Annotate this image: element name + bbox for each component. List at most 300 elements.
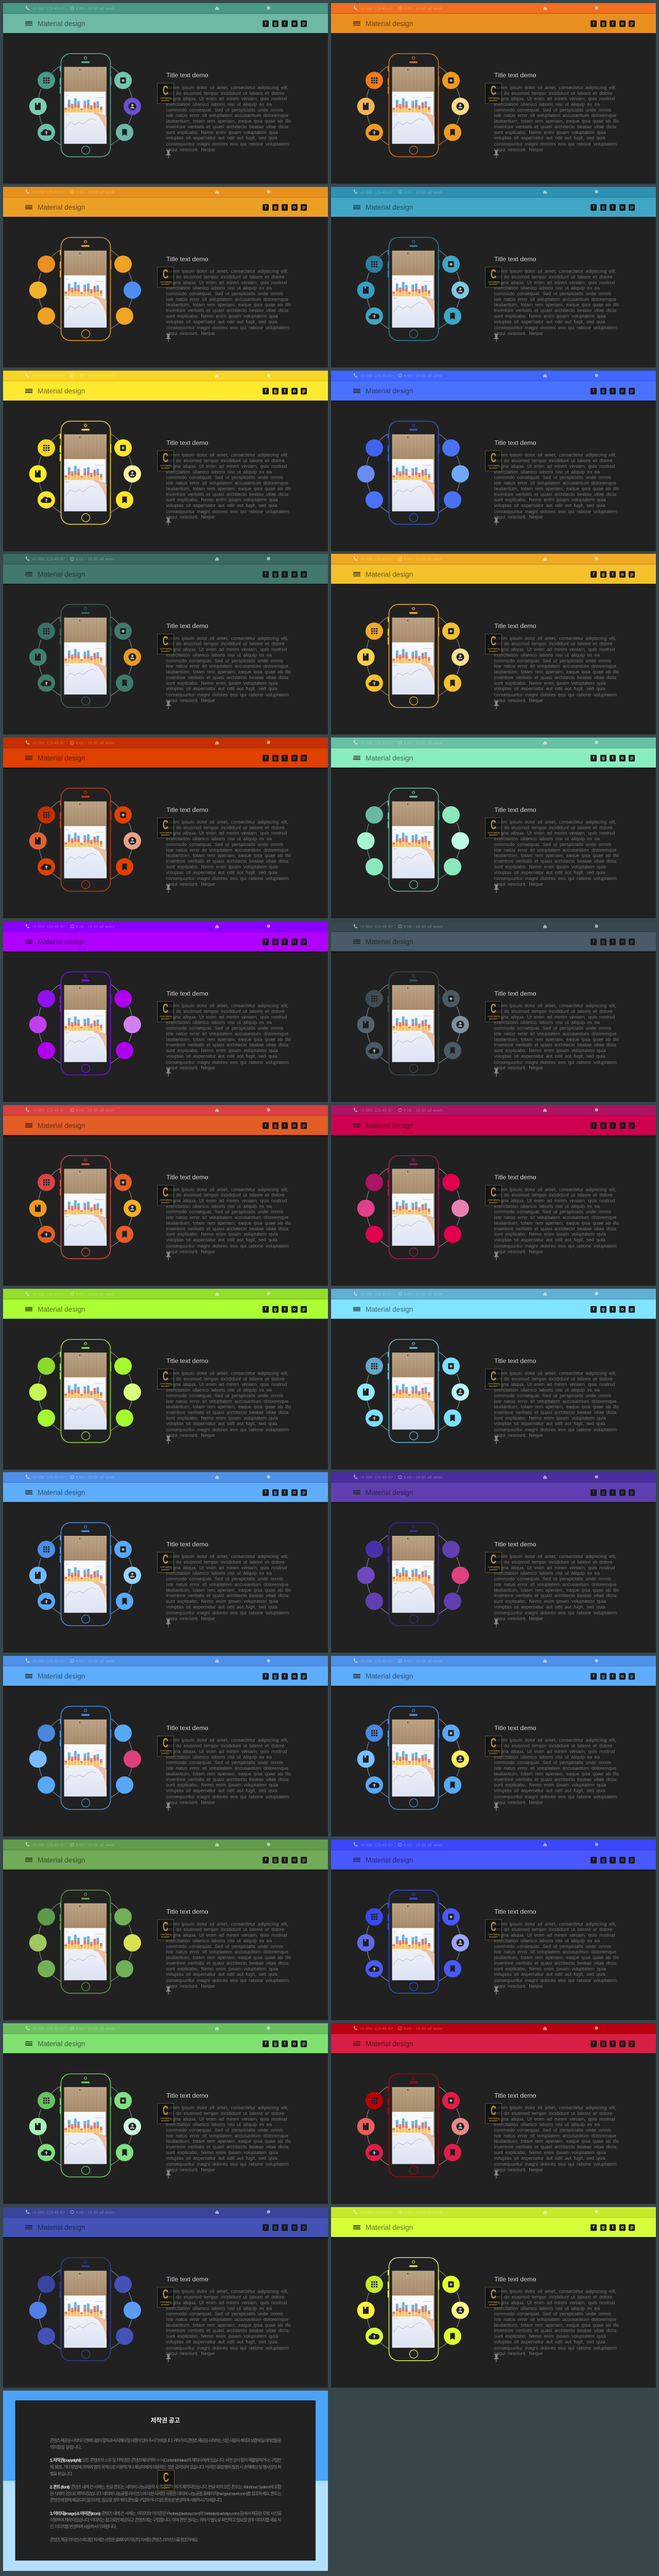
header bar <box>3 1299 328 1319</box>
watermark badge <box>485 1369 502 1389</box>
body text: Lorem ipsum dolor sit amet, consectetur adipiscing elit, <box>166 1003 288 1008</box>
panel: blue slide <box>331 370 656 551</box>
header bar: p <box>302 1673 305 1679</box>
header bar: Material design <box>366 2224 413 2231</box>
icon nodes <box>29 1540 141 1610</box>
header bar: f <box>265 1307 267 1312</box>
body text: sequi nesciunt. Neque <box>166 1800 215 1805</box>
watermark badge: C <box>163 1920 168 1934</box>
header bar: f <box>593 2225 595 2230</box>
title: Title text demo <box>494 1358 536 1365</box>
header bar <box>3 932 328 951</box>
header bar: p <box>630 1490 633 1496</box>
watermark badge <box>157 1552 174 1573</box>
header bar: Material design <box>366 387 413 395</box>
header bar: f <box>265 1123 267 1128</box>
body text: voluptas sit aspernatur aut odit aut fugit, sed quia <box>494 1238 605 1243</box>
body text: iste natus error sit voluptatem accusantium doloremque <box>166 1031 288 1037</box>
body text: inventore veritatis et quasi architecto beatae vitae dicta <box>166 1961 288 1966</box>
top bar: 9:00 - 18:00 all week <box>76 1842 115 1847</box>
body text: sequi nesciunt. Neque <box>166 698 215 703</box>
phone <box>388 1522 439 1625</box>
icon: pin <box>494 1069 498 1077</box>
header bar: t <box>612 1490 614 1496</box>
body text: voluptas sit aspernatur aut odit aut fugit, sed quia <box>166 1972 278 1977</box>
body text: iste natus error sit voluptatem accusantium doloremque <box>494 1582 616 1587</box>
phone <box>60 2074 111 2177</box>
header bar: o <box>621 21 624 26</box>
body text: exercitation ullamco laboris nisi ut aliquip ex ea <box>166 102 272 107</box>
body text: sunt explicabo. Nemo enim ipsam voluptatem quia <box>166 681 278 686</box>
body text: voluptas sit aspernatur aut odit aut fugit, sed quia <box>166 1604 278 1609</box>
body text: magna aliqua. Ut enim ad minim veniam, quis nostrud <box>494 1749 615 1754</box>
header bar: f <box>265 755 267 761</box>
top bar: +0 000 123-45-67 <box>32 374 65 378</box>
header bar: f <box>593 205 595 210</box>
icon nodes <box>29 2092 141 2161</box>
body text: exercitation ullamco laboris nisi ut aliquip ex ea <box>494 2306 600 2311</box>
body text: exercitation ullamco laboris nisi ut aliquip ex ea <box>166 1755 272 1760</box>
icon: pin <box>166 701 171 709</box>
body text: sunt explicabo. Nemo enim ipsam voluptatem quia <box>166 865 278 870</box>
top bar: +0 000 123-45-67 <box>360 1475 393 1480</box>
body text: inventore veritatis et quasi architecto beatae vitae dicta <box>494 1594 616 1599</box>
nodes <box>29 990 141 1059</box>
watermark badge <box>485 1920 502 1940</box>
top bar: 9:00 - 18:00 all week <box>404 1842 443 1847</box>
phone diagram <box>3 1656 328 1836</box>
top bar: 9:00 - 18:00 all week <box>76 740 115 745</box>
body text: exercitation ullamco laboris nisi ut aliquip ex ea <box>494 1020 600 1025</box>
header bar <box>3 197 328 217</box>
header bar: Material design <box>366 1489 413 1497</box>
phone diagram <box>331 1289 656 1469</box>
body text: Lorem ipsum dolor sit amet, consectetur adipiscing elit, <box>494 1187 616 1192</box>
icon: pin <box>166 150 171 159</box>
header bar: g <box>602 205 604 210</box>
body text: sed do eiusmod tempor incididunt ut labore et dolore <box>166 2295 284 2300</box>
body text: iste natus error sit voluptatem accusantium doloremque <box>166 1582 288 1587</box>
header bar: Material design <box>38 2224 85 2231</box>
icon: pin <box>494 885 498 893</box>
body text: commodo consequat. Sed ut perspiciatis unde omnis <box>166 291 283 296</box>
watermark badge: C <box>163 2104 168 2118</box>
body text: voluptas sit aspernatur aut odit aut fugit, sed quia <box>494 319 605 325</box>
body text: sequi nesciunt. Neque <box>166 2167 215 2172</box>
watermark badge: CONTENTS <box>160 464 171 467</box>
body text: inventore veritatis et quasi architecto beatae vitae dicta <box>166 2145 288 2149</box>
header bar: p <box>302 1857 305 1863</box>
header bar: t <box>612 571 614 577</box>
panel: deep orange slide <box>3 1105 328 1286</box>
body text: sed do eiusmod tempor incididunt ut labore et dolore <box>494 1743 613 1749</box>
body text: laudantium, totam rem aperiam, eaque ipsa quae ab illo <box>166 1404 291 1410</box>
body text: laudantium, totam rem aperiam, eaque ipsa quae ab illo <box>166 1221 291 1226</box>
body text: Lorem ipsum dolor sit amet, consectetur adipiscing elit, <box>166 1922 288 1927</box>
body text: sunt explicabo. Nemo enim ipsam voluptatem quia <box>166 2334 278 2339</box>
header bar: o <box>293 1307 296 1312</box>
closing note: 콘텐츠 제공 라이선스에 대한 자세한 사항은 홈페이지 하단의 자세한 콘텐츠 라이선스를 참조하세요. <box>50 2537 199 2542</box>
body text: voluptas sit aspernatur aut odit aut fugit, sed quia <box>166 2340 278 2345</box>
body text: inventore veritatis et quasi architecto beatae vitae dicta <box>166 1226 288 1231</box>
header bar: g <box>274 2225 277 2230</box>
body text: commodo consequat. Sed ut perspiciatis unde omnis <box>494 1944 611 1949</box>
header bar: p <box>302 388 305 394</box>
body text: voluptas sit aspernatur aut odit aut fugit, sed quia <box>166 686 278 691</box>
watermark badge: CONTENTS <box>160 97 171 99</box>
top bar: +0 000 123-45-67 <box>32 557 65 562</box>
watermark badge: C <box>163 451 168 465</box>
body text: consequuntur magni dolores eos qui ratione voluptatem <box>494 1059 617 1064</box>
body text: consequuntur magni dolores eos qui ratione voluptatem <box>166 692 289 697</box>
header bar: g <box>602 1857 604 1863</box>
section: copyright <box>50 2458 282 2476</box>
nodes <box>357 1174 469 1243</box>
watermark badge: MARKET <box>161 1752 170 1754</box>
header bar: Material design <box>366 570 413 578</box>
phone diagram <box>29 420 141 524</box>
body text: voluptas sit aspernatur aut odit aut fugit, sed quia <box>166 1788 278 1793</box>
top bar: 9:00 - 18:00 all week <box>76 1292 115 1296</box>
top bar: 9:00 - 18:00 all week <box>76 2210 115 2215</box>
header bar: Material design <box>38 1122 85 1129</box>
body text: inventore veritatis et quasi architecto beatae vitae dicta <box>494 1043 616 1048</box>
header bar <box>3 1483 328 1502</box>
body text: exercitation ullamco laboris nisi ut aliquip ex ea <box>494 1755 600 1760</box>
body text: inventore veritatis et quasi architecto beatae vitae dicta <box>494 2328 616 2333</box>
header bar: g <box>274 571 277 577</box>
header bar: Material design <box>366 204 413 211</box>
header bar: p <box>630 2225 633 2230</box>
body text: iste natus error sit voluptatem accusantium doloremque <box>166 1766 288 1771</box>
nodes <box>29 256 141 325</box>
body text: sunt explicabo. Nemo enim ipsam voluptatem quia <box>494 498 606 503</box>
body text: consequuntur magni dolores eos qui ratione voluptatem <box>494 2345 617 2350</box>
body text: laudantium, totam rem aperiam, eaque ipsa quae ab illo <box>494 1404 619 1410</box>
top bar: 9:00 - 18:00 all week <box>404 190 443 194</box>
watermark badge <box>485 267 502 287</box>
phone <box>388 1156 439 1259</box>
header bar: o <box>293 1490 296 1496</box>
body text <box>166 1187 291 1254</box>
watermark badge: CONTENTS <box>160 1566 171 1568</box>
phone diagram <box>29 972 141 1076</box>
top bar: +0 000 123-45-67 <box>32 190 65 194</box>
icon: pin <box>166 1069 171 1077</box>
title: Title text demo <box>494 1174 536 1181</box>
header bar: Material design <box>38 1672 85 1680</box>
body text: magna aliqua. Ut enim ad minim veniam, quis nostrud <box>494 647 615 652</box>
body text: laudantium, totam rem aperiam, eaque ipsa quae ab illo <box>166 1771 291 1776</box>
body text: magna aliqua. Ut enim ad minim veniam, quis nostrud <box>494 1382 615 1387</box>
header bar: t <box>612 755 614 761</box>
panel: orange slide <box>331 3 656 184</box>
header bar: g <box>274 1490 277 1496</box>
body text: sed do eiusmod tempor incididunt ut labore et dolore <box>494 1377 613 1381</box>
watermark badge: MARKET <box>161 2119 170 2122</box>
body text: magna aliqua. Ut enim ad minim veniam, quis nostrud <box>166 1565 287 1570</box>
section: font: 콘텐츠에 함께 제공되지 않으므로, 필요할 경우 위의 폰트를 구입하거나 다른 폰트로 변경하여 사용하시기 바랍니다. <box>50 2498 223 2503</box>
header bar <box>3 14 328 33</box>
body text: laudantium, totam rem aperiam, eaque ipsa quae ab illo <box>166 2139 291 2144</box>
body text: iste natus error sit voluptatem accusantium doloremque <box>166 2317 288 2322</box>
phone diagram <box>357 420 469 524</box>
header bar: t <box>284 571 286 577</box>
top bar: 9:00 - 18:00 all week <box>76 1475 115 1480</box>
watermark badge: CONTENTS <box>488 1566 499 1568</box>
header bar: o <box>621 2041 624 2047</box>
header bar: f <box>265 1857 267 1863</box>
body text: sequi nesciunt. Neque <box>166 1433 215 1437</box>
body text: commodo consequat. Sed ut perspiciatis unde omnis <box>166 842 283 847</box>
body text: commodo consequat. Sed ut perspiciatis unde omnis <box>494 1760 611 1765</box>
icon nodes <box>357 2276 469 2345</box>
body text: sed do eiusmod tempor incididunt ut labore et dolore <box>494 641 613 647</box>
header bar: Material design <box>366 1122 413 1129</box>
body text: sunt explicabo. Nemo enim ipsam voluptatem quia <box>166 1416 278 1421</box>
body text: laudantium, totam rem aperiam, eaque ipsa quae ab illo <box>494 1771 619 1776</box>
header bar: t <box>612 1857 614 1863</box>
header bar: Material design <box>38 1856 85 1864</box>
watermark badge: MARKET <box>161 834 170 836</box>
body text: sed do eiusmod tempor incididunt ut labore et dolore <box>494 2111 613 2116</box>
body text: consequuntur magni dolores eos qui ratione voluptatem <box>166 876 289 881</box>
phone <box>60 1522 111 1625</box>
header bar: f <box>593 1490 595 1496</box>
top bar <box>331 1289 656 1299</box>
header bar: f <box>265 571 267 577</box>
header bar: o <box>293 1857 296 1863</box>
body text: sed do eiusmod tempor incididunt ut labore et dolore <box>166 275 284 280</box>
watermark badge <box>157 1736 174 1756</box>
body text: magna aliqua. Ut enim ad minim veniam, quis nostrud <box>166 96 287 101</box>
header bar: o <box>293 205 296 210</box>
header bar: Material design <box>38 1489 85 1497</box>
title: Title text demo <box>494 2092 536 2099</box>
icon: pin <box>165 1619 171 1627</box>
body text: Lorem ipsum dolor sit amet, consectetur adipiscing elit, <box>494 2289 616 2294</box>
body text: voluptas sit aspernatur aut odit aut fugit, sed quia <box>166 1421 278 1427</box>
watermark badge <box>485 818 502 838</box>
top bar <box>331 370 656 381</box>
watermark badge: MARKET <box>161 466 170 469</box>
top bar: +0 000 123-45-67 <box>360 190 393 194</box>
body text: consequuntur magni dolores eos qui ratione voluptatem <box>166 509 289 514</box>
top bar: 9:00 - 18:00 all week <box>76 557 115 562</box>
top bar: +0 000 123-45-67 <box>32 6 65 11</box>
phone diagram <box>3 1839 328 2020</box>
watermark badge: MARKET <box>489 99 498 101</box>
body text: magna aliqua. Ut enim ad minim veniam, quis nostrud <box>494 1933 615 1938</box>
header bar: g <box>602 1490 604 1496</box>
body text: sed do eiusmod tempor incididunt ut labore et dolore <box>494 458 613 463</box>
watermark badge: CONTENTS <box>161 2484 172 2486</box>
watermark badge: CONTENTS <box>488 464 499 467</box>
watermark badge: MARKET <box>161 283 170 285</box>
icon nodes <box>29 72 141 141</box>
body text: sequi nesciunt. Neque <box>494 331 543 336</box>
body text: exercitation ullamco laboris nisi ut aliquip ex ea <box>494 102 600 107</box>
body text: inventore veritatis et quasi architecto beatae vitae dicta <box>166 308 288 313</box>
body text: exercitation ullamco laboris nisi ut aliquip ex ea <box>166 2122 272 2127</box>
icon: pin <box>493 2171 499 2178</box>
body text: exercitation ullamco laboris nisi ut aliquip ex ea <box>166 1938 272 1943</box>
icon nodes <box>357 72 469 141</box>
top bar: +0 000 123-45-67 <box>32 924 65 929</box>
section: font: 2. 폰트 (font): 콘텐츠 내에 쓴 서체는, 한글 폰트는, 네이버 나눔글꼴의 사용 권리에 의거 제작되었습니다. 한글 외의 모든 폰트는, Windows System에 포함 <box>50 2484 282 2489</box>
body text <box>494 85 619 152</box>
header bar: t <box>284 1307 286 1312</box>
phone <box>60 238 111 341</box>
watermark badge <box>485 1185 502 1206</box>
body text: commodo consequat. Sed ut perspiciatis unde omnis <box>166 658 283 664</box>
body text: exercitation ullamco laboris nisi ut aliquip ex ea <box>166 1387 272 1393</box>
panel: deep purple slide <box>331 1472 656 1653</box>
top bar <box>331 1839 656 1850</box>
watermark badge <box>157 634 174 654</box>
phone diagram <box>357 237 469 341</box>
header bar <box>3 748 328 768</box>
icon nodes <box>357 2092 469 2161</box>
header bar: g <box>274 1857 277 1863</box>
body text: exercitation ullamco laboris nisi ut aliquip ex ea <box>166 1204 272 1209</box>
nodes <box>29 2276 141 2345</box>
body text: sunt explicabo. Nemo enim ipsam voluptatem quia <box>166 1232 278 1237</box>
phone <box>388 788 439 891</box>
icon nodes <box>29 806 141 875</box>
body text: laudantium, totam rem aperiam, eaque ipsa quae ab illo <box>166 119 291 124</box>
title: Title text demo <box>166 2092 209 2099</box>
body text: magna aliqua. Ut enim ad minim veniam, quis nostrud <box>166 1198 287 1204</box>
body text: sequi nesciunt. Neque <box>494 147 543 152</box>
header bar: g <box>274 1307 277 1312</box>
body text: sequi nesciunt. Neque <box>166 882 215 887</box>
body text: Lorem ipsum dolor sit amet, consectetur adipiscing elit, <box>166 636 288 641</box>
panel: light blue slide, pink accent <box>3 1656 328 1836</box>
body text: laudantium, totam rem aperiam, eaque ipsa quae ab illo <box>494 1955 619 1960</box>
body text: sed do eiusmod tempor incididunt ut labore et dolore <box>166 1560 284 1565</box>
title: Title text demo <box>494 990 536 997</box>
top bar: 9:00 - 18:00 all week <box>404 740 443 745</box>
body text: Lorem ipsum dolor sit amet, consectetur adipiscing elit, <box>166 2105 288 2110</box>
body text: sed do eiusmod tempor incididunt ut labore et dolore <box>494 1927 613 1932</box>
icon nodes <box>357 256 469 325</box>
top bar: 9:00 - 18:00 all week <box>76 1108 115 1113</box>
header bar: f <box>593 1307 595 1312</box>
header bar: g <box>274 939 277 945</box>
body text: magna aliqua. Ut enim ad minim veniam, quis nostrud <box>494 464 615 469</box>
body text: exercitation ullamco laboris nisi ut aliquip ex ea <box>494 469 600 474</box>
phone <box>60 788 111 891</box>
body text: commodo consequat. Sed ut perspiciatis unde omnis <box>494 2312 611 2316</box>
body text: laudantium, totam rem aperiam, eaque ipsa quae ab illo <box>166 853 291 858</box>
body text: consequuntur magni dolores eos qui ratione voluptatem <box>166 325 289 330</box>
header bar: f <box>265 388 267 394</box>
nodes <box>29 1724 141 1794</box>
header bar <box>331 1116 656 1135</box>
watermark badge: MARKET <box>489 1752 498 1754</box>
header bar: t <box>612 1307 614 1312</box>
body text: magna aliqua. Ut enim ad minim veniam, quis nostrud <box>494 2116 615 2122</box>
body text: inventore veritatis et quasi architecto beatae vitae dicta <box>166 1594 288 1599</box>
watermark badge <box>157 83 174 104</box>
phone <box>388 238 439 341</box>
header bar: o <box>621 2225 624 2230</box>
body text: Lorem ipsum dolor sit amet, consectetur adipiscing elit, <box>494 269 616 274</box>
phone diagram <box>331 2023 656 2204</box>
watermark badge: CONTENTS <box>160 280 171 283</box>
body text <box>494 1187 619 1255</box>
section: font <box>50 2484 282 2503</box>
body text: inventore veritatis et quasi architecto beatae vitae dicta <box>166 675 288 680</box>
body text: commodo consequat. Sed ut perspiciatis unde omnis <box>494 1577 611 1582</box>
watermark badge: MARKET <box>489 283 498 285</box>
body text: magna aliqua. Ut enim ad minim veniam, quis nostrud <box>494 1565 615 1570</box>
watermark badge <box>157 1001 174 1022</box>
body text: exercitation ullamco laboris nisi ut aliquip ex ea <box>494 653 600 658</box>
body text: sunt explicabo. Nemo enim ipsam voluptatem quia <box>494 1416 606 1421</box>
top bar: +0 000 123-45-67 <box>32 2210 65 2215</box>
title: Title text demo <box>166 990 209 997</box>
header bar: g <box>602 2225 604 2230</box>
header bar: f <box>593 571 595 577</box>
body text: sed do eiusmod tempor incididunt ut labore et dolore <box>166 1377 284 1381</box>
body text: magna aliqua. Ut enim ad minim veniam, quis nostrud <box>166 1749 287 1754</box>
phone <box>60 1340 111 1443</box>
header bar: p <box>302 1307 305 1312</box>
body text: consequuntur magni dolores eos qui ratione voluptatem <box>166 1243 289 1248</box>
icon: pin <box>493 1436 499 1444</box>
icon nodes <box>357 1908 469 1977</box>
watermark badge: C <box>491 634 496 649</box>
body text: consequuntur magni dolores eos qui ratione voluptatem <box>166 2161 289 2166</box>
body text: magna aliqua. Ut enim ad minim veniam, quis nostrud <box>494 831 615 836</box>
header bar: p <box>302 2041 305 2047</box>
header bar: g <box>602 755 604 761</box>
body text: Lorem ipsum dolor sit amet, consectetur adipiscing elit, <box>494 1371 616 1376</box>
top bar: 9:00 - 18:00 all week <box>76 190 115 194</box>
body text: Lorem ipsum dolor sit amet, consectetur adipiscing elit, <box>494 1738 616 1743</box>
header bar: Material design <box>38 2040 85 2047</box>
body text: laudantium, totam rem aperiam, eaque ipsa quae ab illo <box>494 2139 619 2144</box>
body text: sequi nesciunt. Neque <box>494 1800 543 1805</box>
body text: sunt explicabo. Nemo enim ipsam voluptatem quia <box>494 2334 606 2339</box>
watermark badge: MARKET <box>489 2303 498 2306</box>
watermark badge: MARKET <box>489 1017 498 1020</box>
body text: iste natus error sit voluptatem accusantium doloremque <box>166 848 288 853</box>
watermark badge: CONTENTS <box>160 831 171 834</box>
phone diagram <box>357 604 469 708</box>
body text: laudantium, totam rem aperiam, eaque ipsa quae ab illo <box>166 486 291 492</box>
watermark badge <box>157 1185 174 1206</box>
watermark badge <box>485 2103 502 2124</box>
title: Title text demo <box>166 72 209 79</box>
watermark badge: CONTENTS <box>160 1933 171 1936</box>
header bar: t <box>284 939 286 945</box>
nodes <box>29 1358 141 1427</box>
body text: voluptas sit aspernatur aut odit aut fugit, sed quia <box>494 135 605 141</box>
body text: laudantium, totam rem aperiam, eaque ipsa quae ab illo <box>494 1588 619 1593</box>
header bar: g <box>602 571 604 577</box>
body text: consequuntur magni dolores eos qui ratione voluptatem <box>494 509 617 514</box>
top bar: 9:00 - 18:00 all week <box>404 6 443 11</box>
title: Title text demo <box>166 256 209 263</box>
header bar: o <box>293 1123 296 1128</box>
watermark badge <box>158 2470 175 2491</box>
watermark badge: C <box>163 634 168 649</box>
section: font: 된 서체의 것으로 제작되었습니다. 네이버 나눔글꼴 라이선스에 대한 자세한 사항은 네이버 나눔글꼴 홈페이지(hangeul.naver.com)를 참조하세요. 폰트는 <box>50 2491 282 2496</box>
body text: Lorem ipsum dolor sit amet, consectetur adipiscing elit, <box>166 85 288 90</box>
